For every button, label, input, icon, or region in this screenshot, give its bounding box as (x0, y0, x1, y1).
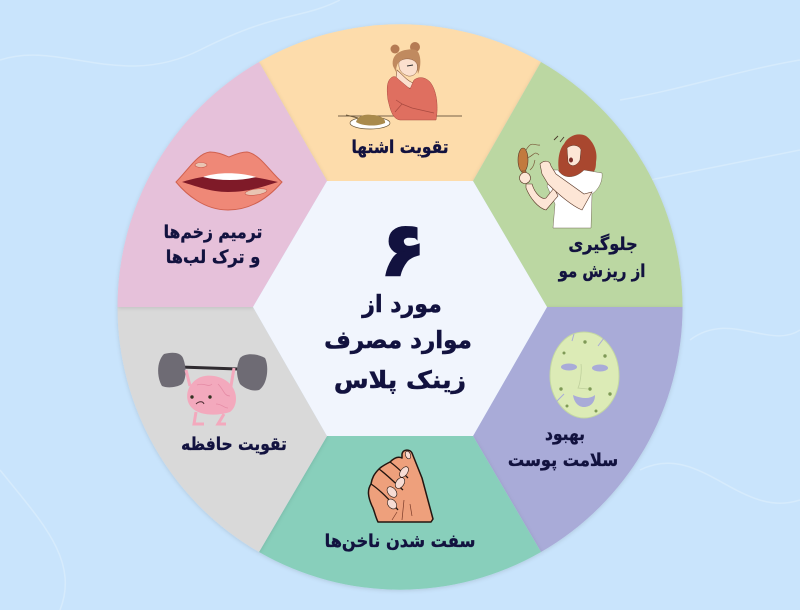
panel: nails sector (259, 436, 541, 590)
title: زینک پلاس (334, 366, 466, 394)
panel: memory sector (117, 307, 327, 552)
label: lip wounds (164, 221, 262, 268)
panel: appetite sector (259, 24, 541, 181)
icon: lips (176, 152, 282, 210)
icon: woman with hairbrush (518, 134, 602, 228)
label: skin health: بهبود (545, 423, 585, 445)
title: مورد از (361, 291, 442, 318)
title (324, 291, 472, 394)
icon: green face mask (550, 332, 619, 418)
icon: brain lifting barbell (158, 353, 267, 424)
label: lip wounds: و ترک لب‌ها (166, 247, 260, 268)
panel: lip wound sector (117, 62, 327, 307)
label: hair loss: جلوگیری (568, 233, 638, 255)
panel: skin health sector (473, 307, 683, 552)
label: appetite: تقویت اشتها (351, 136, 449, 158)
panel: center hexagon (253, 181, 547, 436)
panel: hair loss sector (473, 62, 683, 307)
icon: bored woman with plate (338, 42, 462, 129)
label: hair loss (558, 233, 645, 282)
label: memory: تقویت حافظه (181, 433, 287, 455)
icon: fist with nails (368, 450, 433, 522)
label: lip wounds: ترمیم زخم‌ها (164, 221, 262, 243)
title: موارد مصرف (324, 326, 472, 354)
label: nails: سفت شدن ناخن‌ها (325, 531, 475, 552)
number six: ۶ (380, 207, 426, 293)
label: hair loss: از ریزش مو (558, 261, 645, 282)
label: skin health (508, 423, 618, 471)
label: skin health: سلامت پوست (508, 450, 618, 471)
